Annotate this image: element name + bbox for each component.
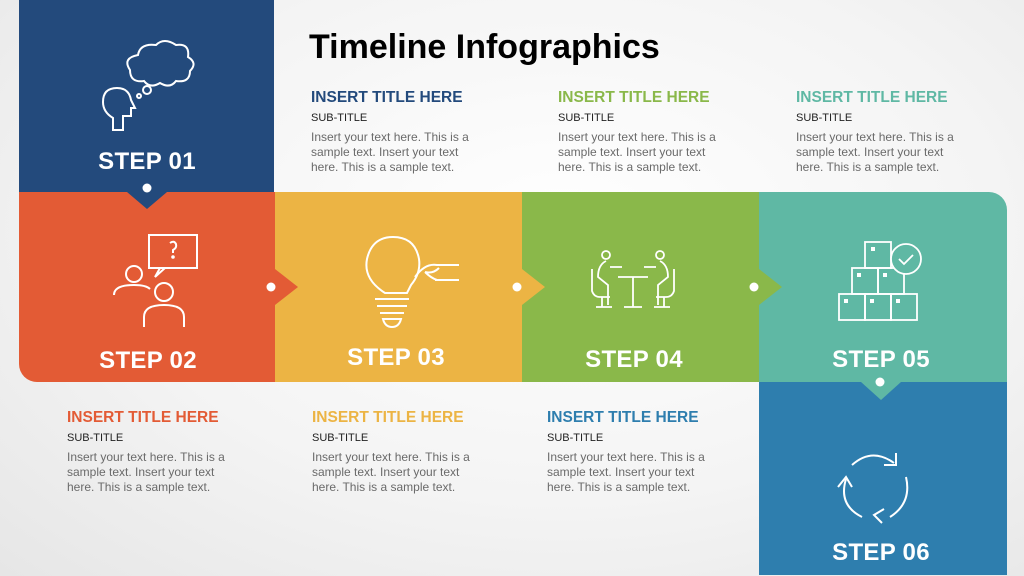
text block: bottom 2: INSERT TITLE HERE: [312, 409, 464, 426]
text block: bottom 1: sample text. Insert your text: [67, 465, 214, 479]
text block: bottom 2: [312, 409, 470, 494]
icon: meeting table: [591, 250, 675, 308]
text block: bottom 1: Insert your text here. This is a: [67, 450, 225, 464]
arrow: step01 down: [127, 184, 167, 209]
text block: top 2: SUB-TITLE: [558, 112, 614, 124]
text block: top 1: [311, 89, 469, 174]
label: step 06: STEP 06: [832, 539, 930, 566]
label: step 03: STEP 03: [347, 344, 445, 371]
title: Timeline Infographics: [309, 28, 660, 66]
text block: bottom 3: sample text. Insert your text: [547, 465, 694, 479]
text block: bottom 1: [67, 409, 225, 494]
arrow: step03 right: [512, 269, 545, 305]
text block: top 1: here. This is a sample text.: [311, 160, 454, 174]
text block: top 2: here. This is a sample text.: [558, 160, 701, 174]
arrow: step02 right: [266, 269, 298, 305]
label: step 02: STEP 02: [99, 347, 197, 374]
text block: top 3: sample text. Insert your text: [796, 145, 943, 159]
label: step 04: STEP 04: [585, 346, 683, 373]
text block: top 3: INSERT TITLE HERE: [796, 89, 948, 106]
text block: bottom 2: sample text. Insert your text: [312, 465, 459, 479]
text block: bottom 1: INSERT TITLE HERE: [67, 409, 219, 426]
text block: top 2: Insert your text here. This is a: [558, 130, 716, 144]
text block: top 1: sample text. Insert your text: [311, 145, 458, 159]
panel: step 01 dark blue: [19, 0, 274, 192]
icon: boxes check: [838, 241, 922, 321]
text block: top 2: [558, 89, 716, 174]
text block: bottom 3: here. This is a sample text.: [547, 480, 690, 494]
text block: top 3: here. This is a sample text.: [796, 160, 939, 174]
text block: bottom 3: INSERT TITLE HERE: [547, 409, 699, 426]
text block: top 1: SUB-TITLE: [311, 112, 367, 124]
text block: bottom 2: here. This is a sample text.: [312, 480, 455, 494]
text block: top 3: SUB-TITLE: [796, 112, 852, 124]
panel: step 06 blue: [759, 382, 1007, 575]
text block: top 3: Insert your text here. This is a: [796, 130, 954, 144]
label: step 01: STEP 01: [98, 148, 196, 175]
text block: bottom 3: SUB-TITLE: [547, 432, 603, 444]
arrow: step05 down: [861, 378, 901, 400]
text block: top 1: INSERT TITLE HERE: [311, 89, 463, 106]
panel: step 02 orange: [19, 192, 276, 382]
text block: bottom 3: [547, 409, 705, 494]
text block: top 2: INSERT TITLE HERE: [558, 89, 710, 106]
icon: cycle arrows: [837, 453, 908, 524]
arrow: step04 right: [750, 269, 782, 305]
icon: thinking head: [102, 40, 195, 131]
panel: step 04 green: [522, 192, 760, 382]
text block: top 2: sample text. Insert your text: [558, 145, 705, 159]
icon: people question: [113, 234, 198, 327]
text block: top 1: Insert your text here. This is a: [311, 130, 469, 144]
icon: light bulb: [365, 236, 459, 328]
text block: top 3: [796, 89, 954, 174]
text block: bottom 3: Insert your text here. This is a: [547, 450, 705, 464]
text block: bottom 1: here. This is a sample text.: [67, 480, 210, 494]
text block: bottom 2: Insert your text here. This is a: [312, 450, 470, 464]
text block: bottom 2: SUB-TITLE: [312, 432, 368, 444]
label: step 05: STEP 05: [832, 346, 930, 373]
panel: step 03 yellow: [275, 192, 523, 382]
text block: bottom 1: SUB-TITLE: [67, 432, 123, 444]
panel: step 05 teal: [759, 192, 1007, 382]
